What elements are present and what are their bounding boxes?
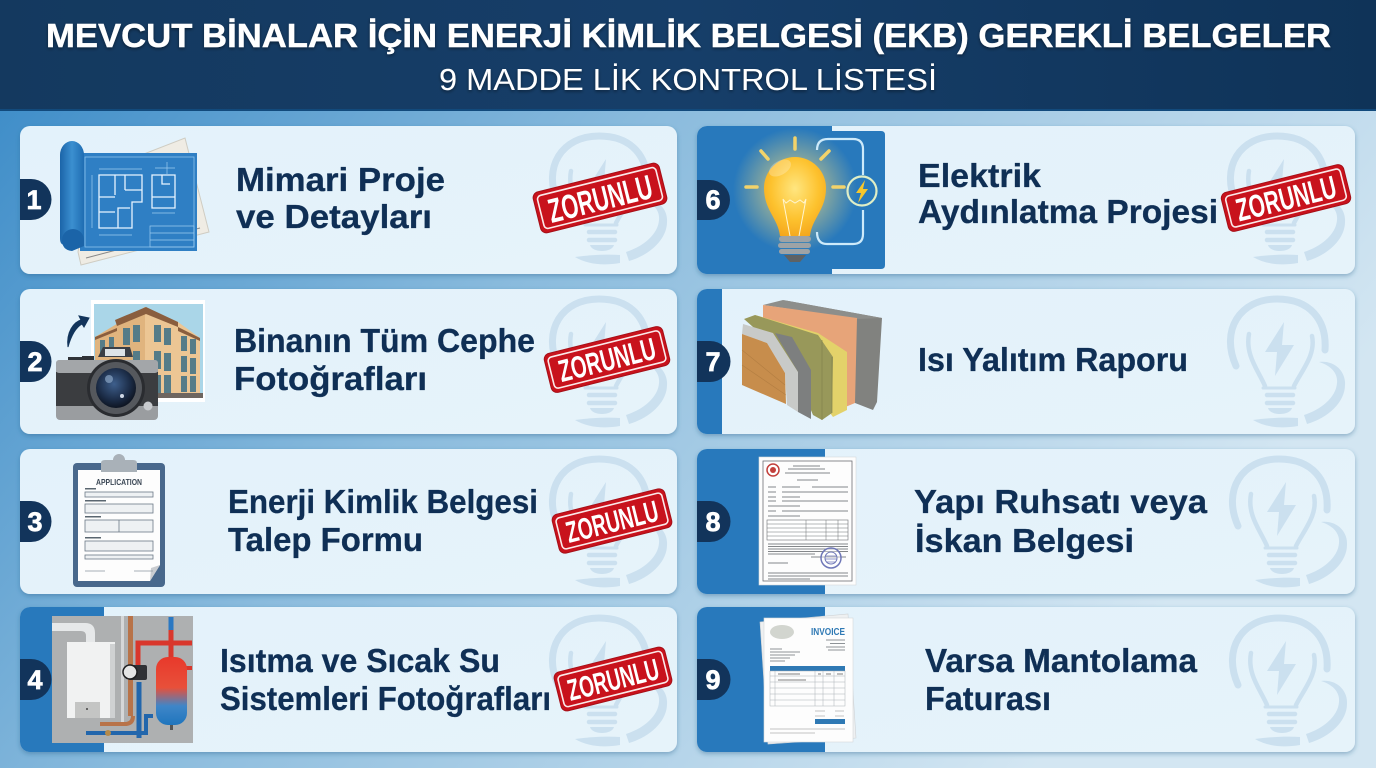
heading: Binanın Tüm Cephe xyxy=(234,322,535,359)
number badge 4: 4 xyxy=(27,665,43,695)
watermark bulb xyxy=(1232,618,1347,746)
heading: Isıtma ve Sıcak Su xyxy=(220,642,500,679)
icon: invoice papers: INVOICE xyxy=(811,626,845,638)
icon: insulation wall layers xyxy=(742,300,882,420)
panel: item 2 xyxy=(20,289,677,434)
heading: İskan Belgesi xyxy=(915,522,1134,559)
icon: invoice papers xyxy=(760,614,856,744)
number badge 8: 8 xyxy=(705,507,721,537)
heading xyxy=(234,322,535,397)
panel: item 9 xyxy=(697,607,1355,752)
number badge 6 xyxy=(697,180,730,220)
panel: item 6 xyxy=(697,126,1355,274)
heading: Varsa Mantolama xyxy=(925,642,1198,679)
heading xyxy=(914,483,1208,559)
heading xyxy=(220,642,551,717)
heading: Yapı Ruhsatı veya xyxy=(914,483,1208,520)
number badge 9: 9 xyxy=(705,665,721,695)
heading xyxy=(228,483,538,558)
heading: Enerji Kimlik Belgesi xyxy=(228,483,538,520)
stamp: zorunlu: ZORUNLU xyxy=(563,495,662,550)
heading xyxy=(236,161,445,235)
icon: clipboard application form xyxy=(73,454,165,587)
watermark bulb xyxy=(552,618,667,746)
panel: item 8 xyxy=(697,449,1355,594)
number badge 6: 6 xyxy=(705,185,721,215)
heading: Fotoğrafları xyxy=(234,360,427,397)
icon: clipboard application form: APPLICATION xyxy=(96,477,142,487)
watermark bulb xyxy=(552,459,667,587)
subtitle: 9 MADDE LİK KONTROL LİSTESİ xyxy=(439,62,937,97)
number badge 3 xyxy=(20,501,52,542)
number badge 7 xyxy=(697,341,730,382)
icon: blueprint xyxy=(60,138,209,265)
number badge 2 xyxy=(20,341,52,382)
stamp: zorunlu: ZORUNLU xyxy=(564,653,662,708)
heading xyxy=(918,157,1218,230)
heading: ve Detayları xyxy=(236,198,432,235)
number badge 4 xyxy=(20,659,52,700)
watermark bulb xyxy=(552,136,667,264)
heading xyxy=(925,642,1198,717)
icon: light bulb with power symbol xyxy=(733,128,876,262)
icon: building permit document xyxy=(759,457,856,585)
heading: Mimari Proje xyxy=(236,161,445,198)
stamp: zorunlu xyxy=(553,646,673,712)
heading: Elektrik xyxy=(918,157,1042,194)
stamp: zorunlu xyxy=(532,162,668,234)
stamp: zorunlu xyxy=(1220,163,1352,233)
number badge 2: 2 xyxy=(27,347,43,377)
watermark bulb xyxy=(1230,299,1345,427)
watermark bulb xyxy=(1230,136,1345,264)
stamp: zorunlu: ZORUNLU xyxy=(544,168,656,231)
panel: item 1 xyxy=(20,126,677,274)
number badge 7: 7 xyxy=(705,347,721,377)
panel: item 4 xyxy=(20,607,677,752)
heading: Sistemleri Fotoğrafları xyxy=(220,680,551,717)
number badge 1 xyxy=(20,179,52,220)
stamp: zorunlu: ZORUNLU xyxy=(555,331,659,389)
watermark bulb xyxy=(552,299,667,427)
number badge 1: 1 xyxy=(26,185,42,215)
title: MEVCUT BİNALAR İÇİN ENERJİ KİMLİK BELGESİ (EKB) GEREKLİ BELGELER xyxy=(46,17,1331,54)
number badge 9 xyxy=(697,659,730,700)
heading: Talep Formu xyxy=(228,521,423,558)
header banner xyxy=(0,0,1376,111)
stamp: zorunlu xyxy=(543,325,671,394)
heading: Aydınlatma Projesi xyxy=(918,193,1218,230)
heading: Isı Yalıtım Raporu xyxy=(918,341,1188,378)
watermark bulb xyxy=(1232,459,1347,587)
panel: item 7 xyxy=(697,289,1355,434)
icon: camera and building photo xyxy=(56,300,205,420)
icon: boiler and heating system photo xyxy=(52,616,193,743)
panel: item 3 xyxy=(20,449,677,594)
number badge 3: 3 xyxy=(27,507,43,537)
heading: Faturası xyxy=(925,680,1051,717)
number badge 8 xyxy=(697,501,730,542)
stamp: zorunlu xyxy=(551,488,673,554)
